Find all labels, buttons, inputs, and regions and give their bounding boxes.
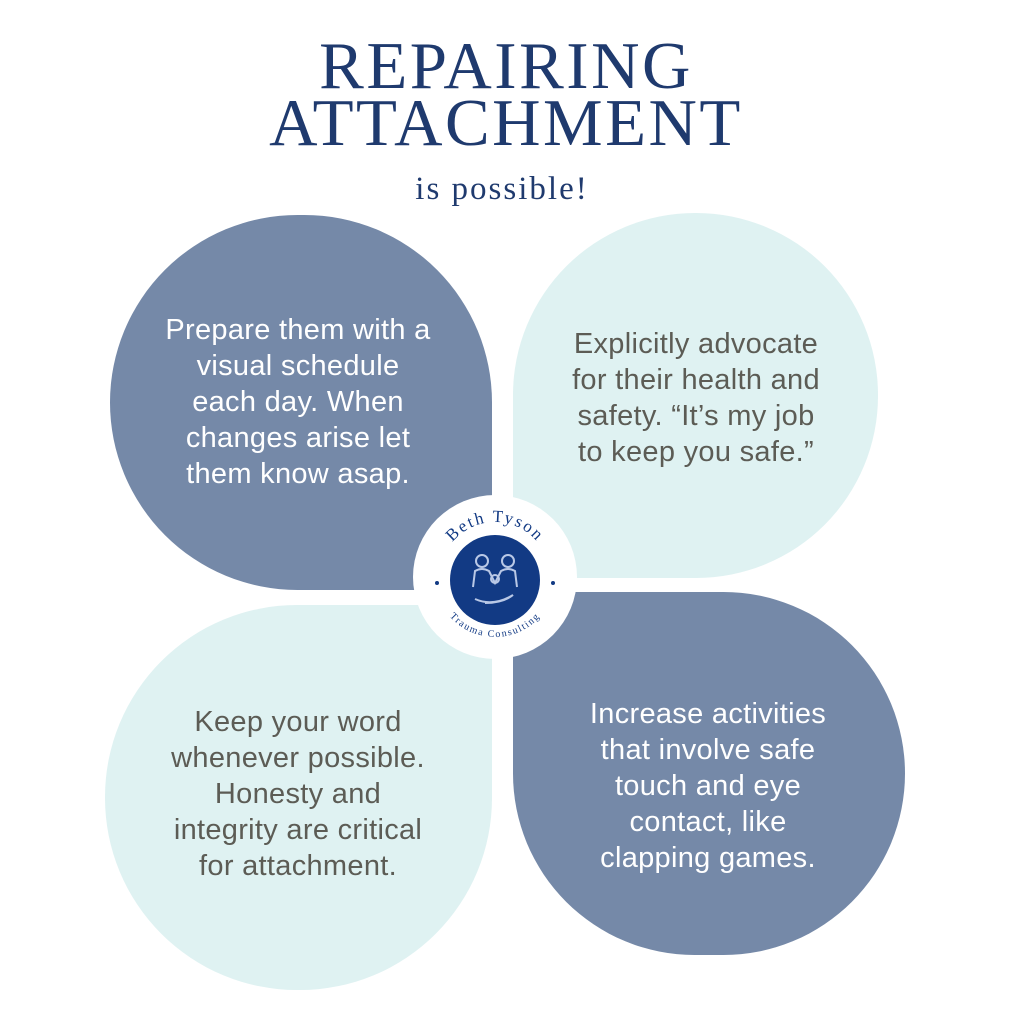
text: top-right: for their health and	[572, 364, 820, 396]
text: bottom-right: contact, like	[629, 806, 787, 838]
text: top-left: them know asap.	[186, 458, 410, 490]
title	[269, 29, 743, 160]
text: top-right: to keep you safe.”	[578, 436, 814, 468]
title: ATTACHMENT	[269, 86, 743, 160]
text: bottom-right: Increase activities	[590, 698, 826, 730]
logo	[413, 495, 577, 659]
text: top-right: safety. “It’s my job	[578, 400, 814, 432]
text: top-left: Prepare them with a	[165, 314, 431, 346]
text: bottom-left: for attachment.	[199, 850, 397, 882]
text: bottom-right: touch and eye	[615, 770, 801, 802]
text: top-left: visual schedule	[197, 350, 399, 382]
text: top-left: changes arise let	[186, 422, 410, 454]
panel: bottom-right	[513, 592, 905, 955]
text: top-right	[572, 328, 820, 468]
text: bottom-right	[590, 698, 826, 874]
text: bottom-left: integrity are critical	[174, 814, 422, 846]
text: bottom-left: whenever possible.	[171, 742, 425, 774]
text: top-left: each day. When	[192, 386, 404, 418]
text: top-left	[165, 314, 431, 490]
text: top-right: Explicitly advocate	[574, 328, 818, 360]
panel: top-left	[110, 215, 492, 590]
text: bottom-left: Keep your word	[194, 706, 402, 738]
panel: top-right	[513, 213, 878, 578]
text: bottom-left	[171, 706, 425, 882]
text: bottom-left: Honesty and	[215, 778, 381, 810]
panel: bottom-left	[105, 605, 492, 990]
title: REPAIRING	[319, 29, 693, 103]
text: bottom-right: that involve safe	[601, 734, 815, 766]
logo: Beth Tyson	[444, 510, 540, 542]
logo: Trauma Consulting	[450, 612, 540, 638]
subtitle: is possible!	[415, 171, 589, 207]
text: bottom-right: clapping games.	[600, 842, 816, 874]
